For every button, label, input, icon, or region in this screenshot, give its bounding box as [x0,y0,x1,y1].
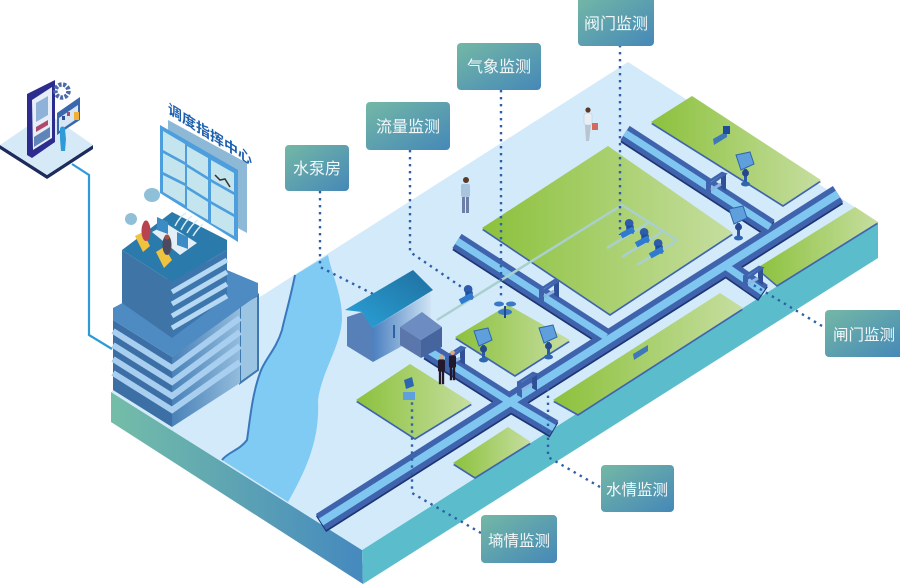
platform: side faces [111,222,878,584]
label: 阀门监测 [578,0,654,46]
figure [60,127,66,151]
label: 阀门监测: 阀门监测 [584,15,648,33]
label: 水情监测: 水情监测 [606,481,668,499]
label: 气象监测: 气象监测 [467,58,531,76]
label: 墒情监测: 墒情监测 [488,532,550,550]
label: 闸门监测 [825,310,900,357]
clouds [125,188,160,225]
people [438,107,598,384]
gates [445,173,763,398]
field: bottom small [453,427,531,477]
pump house [345,270,442,362]
dotted line: 闸门监测 [750,283,822,326]
data links [175,213,203,236]
solar sensors [474,152,754,362]
platform: top surface [111,62,878,550]
label: 水情监测 [601,465,674,512]
label: 闸门监测: 闸门监测 [833,326,895,344]
field: long lower [553,293,743,414]
label: 气象监测 [457,43,541,90]
label: 流量监测: 流量监测 [376,118,440,136]
water channels [321,133,838,524]
upper tower [122,212,227,338]
gear [56,84,68,98]
mobile terminal [0,80,93,179]
title: 调度指挥中心: 调度指挥中心 [168,100,252,169]
cameras [403,126,730,400]
dotted line: 墒情监测 [412,400,481,533]
app window [57,97,80,135]
valves [621,219,663,256]
command centre building [113,188,258,427]
water pipe and branch pipes [437,205,677,320]
dotted line: 水情监测 [548,388,600,487]
dotted line: 阀门监测 [619,45,621,235]
fields [356,96,878,479]
dotted line: 气象监测 [500,90,502,300]
label: 流量监测 [366,102,450,150]
operators and desks [135,217,197,268]
lower tower [113,260,258,427]
dotted line: 流量监测 [410,150,463,288]
field: upper right [651,96,821,205]
flow meter [460,285,473,302]
field: lower left [356,364,472,438]
cable to mobile terminal [72,164,112,349]
field: central large [482,146,733,314]
weather station [494,302,516,318]
phone [27,80,55,158]
dotted line: 水泵房 [320,191,375,295]
field edge shadows [356,98,878,479]
field: right edge [757,207,878,285]
dispatch screen wall [160,120,247,242]
label: 水泵房 [285,145,349,191]
river [222,255,342,502]
field: centre small [455,305,570,375]
label: 墒情监测 [481,515,557,563]
label: 水泵房: 水泵房 [293,160,341,178]
screen panels [163,131,234,236]
